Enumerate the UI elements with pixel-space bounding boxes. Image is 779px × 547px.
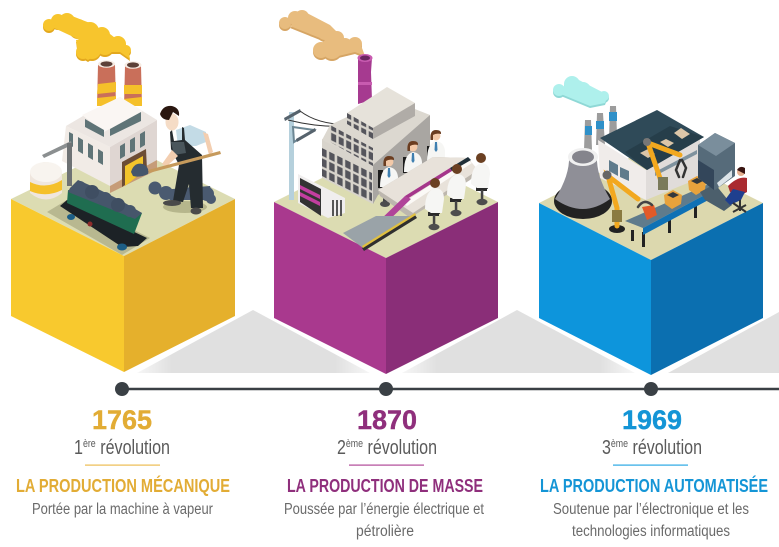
text: 1969 column: technologies informatiques (572, 523, 730, 540)
text: 1969 column: révolution (628, 437, 702, 459)
icon: conveyor with boxes (625, 176, 714, 247)
icon: robot arm two (643, 138, 686, 190)
icon: tan smoke (279, 10, 365, 61)
text: 1765 column: LA PRODUCTION MÉCANIQUE (16, 475, 230, 496)
text: 1765 column: ère (83, 438, 96, 450)
text: 1870 column: Poussée par l’énergie électrique et (284, 501, 485, 518)
icon: cooling tower (554, 148, 612, 219)
icon: coal wagon (47, 180, 150, 255)
text: 1969 column: 3 (602, 437, 613, 459)
icon: assembly table (343, 157, 478, 251)
icon: transformers (298, 174, 345, 218)
text: 1870 column: ème (346, 438, 363, 450)
text: 1870 column: LA PRODUCTION DE MASSE (287, 476, 483, 496)
icon: robot arm one (602, 170, 652, 233)
text: 1969 column (540, 405, 768, 540)
worker with shovel (148, 106, 221, 214)
seated workers back row (425, 153, 490, 230)
icon: yellow smoke (43, 13, 131, 62)
text: 1765 column: 1 (74, 437, 85, 459)
background mountains (137, 310, 779, 373)
icon: factory building (62, 97, 157, 193)
text: 1765 column (16, 405, 230, 518)
panel: first revolution cube (11, 13, 235, 372)
timeline (115, 382, 779, 396)
icon: automated factory (598, 110, 704, 200)
icon: three chimneys (584, 106, 617, 150)
cube base magenta (274, 146, 498, 374)
icon: server and operator (698, 133, 747, 212)
icon: magenta chimney (358, 54, 372, 104)
icon: power pole (284, 109, 375, 200)
text: 1969 column: 1969 (622, 405, 682, 435)
text: 1765 column: révolution (96, 437, 170, 459)
cube base blue (539, 147, 763, 375)
text: 1870 column: 2 (337, 437, 348, 459)
text: 1765 column: Portée par la machine à vapeur (32, 501, 213, 518)
panel: second revolution cube (274, 10, 498, 374)
text: 1765 column: 1765 (92, 405, 152, 435)
icon: water tank and pipe (30, 141, 72, 200)
text: 1969 column: ème (611, 438, 628, 450)
text: 1870 column: 1870 (357, 405, 417, 435)
icon: large factory block (322, 87, 430, 204)
seated workers front row (378, 130, 445, 188)
icon: coal heap (148, 182, 216, 204)
cube base yellow (11, 144, 235, 372)
icon: brick chimneys (97, 60, 142, 106)
text: 1870 column: révolution (363, 437, 437, 459)
text: 1870 column (284, 405, 485, 540)
text: 1969 column: Soutenue par l’électronique et les (553, 501, 749, 518)
text: 1870 column: pétrolière (356, 523, 414, 540)
panel: third revolution cube (539, 76, 763, 375)
icon: pale cloud (553, 76, 609, 108)
